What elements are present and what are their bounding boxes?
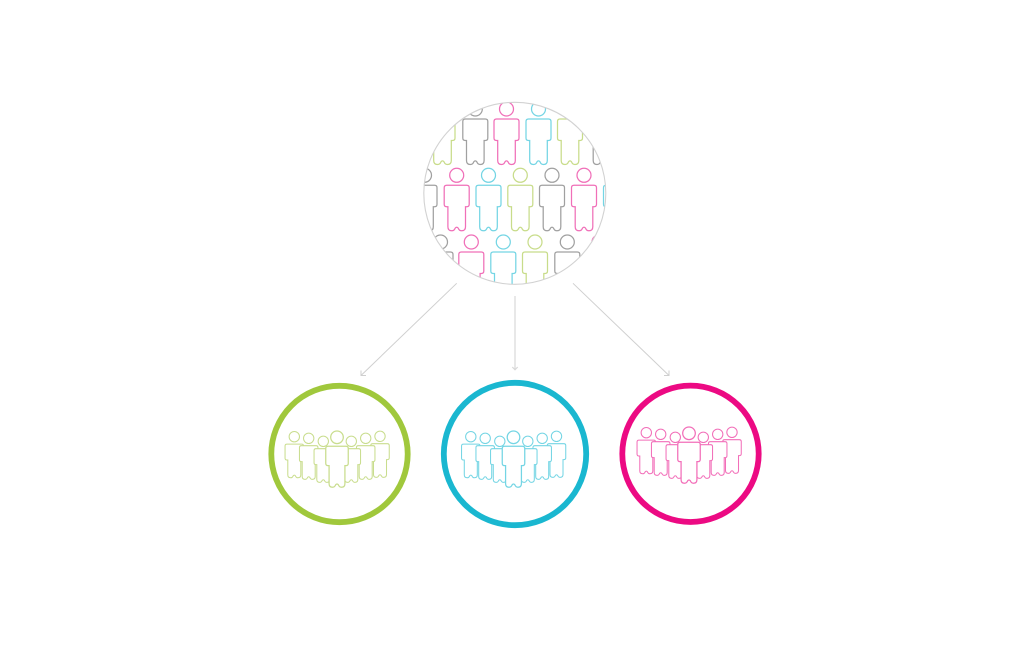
- panel: source population circle: [423, 102, 606, 285]
- arrow: to green segment: [361, 283, 457, 376]
- people row 3: [436, 234, 595, 284]
- people row 2: [424, 168, 605, 232]
- ring: green: [271, 386, 408, 522]
- arrow: to pink segment: [573, 283, 669, 376]
- icon: green crowd: [285, 431, 389, 487]
- panel: pink segment: [622, 386, 759, 522]
- ring: pink: [622, 386, 759, 522]
- icon: pink crowd: [637, 427, 741, 483]
- panel: blue segment: [444, 383, 586, 525]
- panel: green segment: [271, 386, 408, 522]
- icon: blue crowd: [462, 431, 566, 487]
- diagram: population split into three segments: [268, 102, 762, 528]
- arrow: to blue segment: [512, 296, 518, 370]
- people row 1: [430, 102, 614, 164]
- ring: blue: [444, 383, 586, 525]
